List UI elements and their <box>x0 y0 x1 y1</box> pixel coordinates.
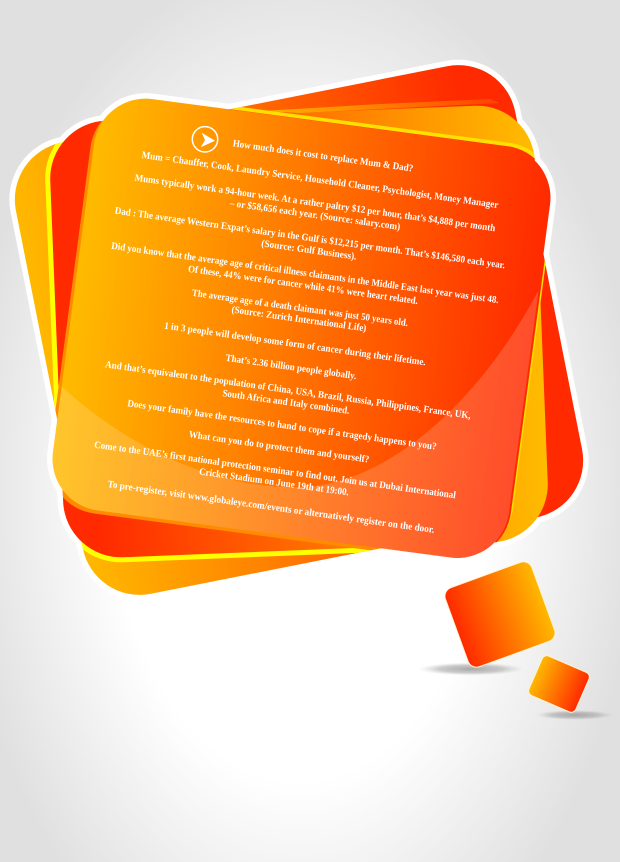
body text: Mum: Mum = Chauffer, Cook, Laundry Service, Household Cleaner, Psychologist, Money Manager <box>141 150 499 211</box>
body text: questions: What can you do to protect them and yourself? <box>188 429 370 466</box>
body text: claimants: Did you know that the average age of critical illness claimants in the Middle East last year was just 48. <box>111 241 500 306</box>
body text: cancer statistics <box>104 321 472 422</box>
body text: claimants: The average age of a death claimant was just 50 years old. <box>191 288 409 329</box>
back card <box>5 55 593 605</box>
yellow edge of middle card <box>45 142 382 562</box>
body text: cancer statistics: And that’s equivalent to the population of China, USA, Brazil, Russia, Philippines, France, UK, <box>104 359 472 422</box>
orange lip under front card <box>56 120 382 550</box>
body text: cancer statistics: 1 in 3 people will develop some form of cancer during their lifetime. <box>163 321 427 368</box>
body text: cancer statistics: That’s 2.36 billion people globally. <box>225 353 357 382</box>
body text: seminar invitation: To pre-register, visit www.globaleye.com/events or alternatively register on the door. <box>107 479 436 536</box>
body text: claimants: (Source: Zurich International Life) <box>231 305 367 334</box>
body text: Dad: Dad : The average Western Expat’s salary in the Gulf is $12,215 per month. That’s $146,580 each year. <box>114 206 506 271</box>
body text: seminar invitation: Cricket Stadium on June 19th at 19:00. <box>198 467 350 499</box>
white outline of the stacked cards <box>5 55 593 605</box>
icon: arrow in circle <box>192 127 218 152</box>
body text: Mum: – or $58,656 each year. (Source: salary.com) <box>228 198 401 233</box>
small bubble square <box>527 654 591 714</box>
body text: Mum: Mums typically work a 94-hour week. At a rather paltry $12 per hour, that’s $4,888 per month <box>134 173 496 234</box>
body text: Dad: (Source: Gulf Business). <box>261 238 358 263</box>
front card <box>46 92 557 564</box>
large bubble square <box>442 559 558 670</box>
heading: How much does it cost to replace Mum & Dad? <box>232 138 414 175</box>
speech bubble <box>5 55 593 605</box>
shadow: large square <box>418 662 524 676</box>
body text: seminar invitation: Come to the UAE’s first national protection seminar to find out. Join us at Dubai International <box>93 440 457 501</box>
body text: seminar invitation <box>93 440 457 536</box>
body text: questions: Does your family have the resources to hand to cope if a tragedy happens to you? <box>127 398 437 453</box>
layered edges of front card <box>56 107 546 550</box>
light overlay on lower part of front card <box>52 292 538 558</box>
body text: cancer statistics: South Africa and Italy combined. <box>222 388 351 417</box>
middle card <box>48 103 550 560</box>
text block <box>93 138 506 536</box>
body text: claimants: Of these, 44% were for cancer while 41% were heart related. <box>187 264 419 307</box>
darker band at top of middle card <box>262 99 500 113</box>
shadow: small square <box>535 710 615 720</box>
